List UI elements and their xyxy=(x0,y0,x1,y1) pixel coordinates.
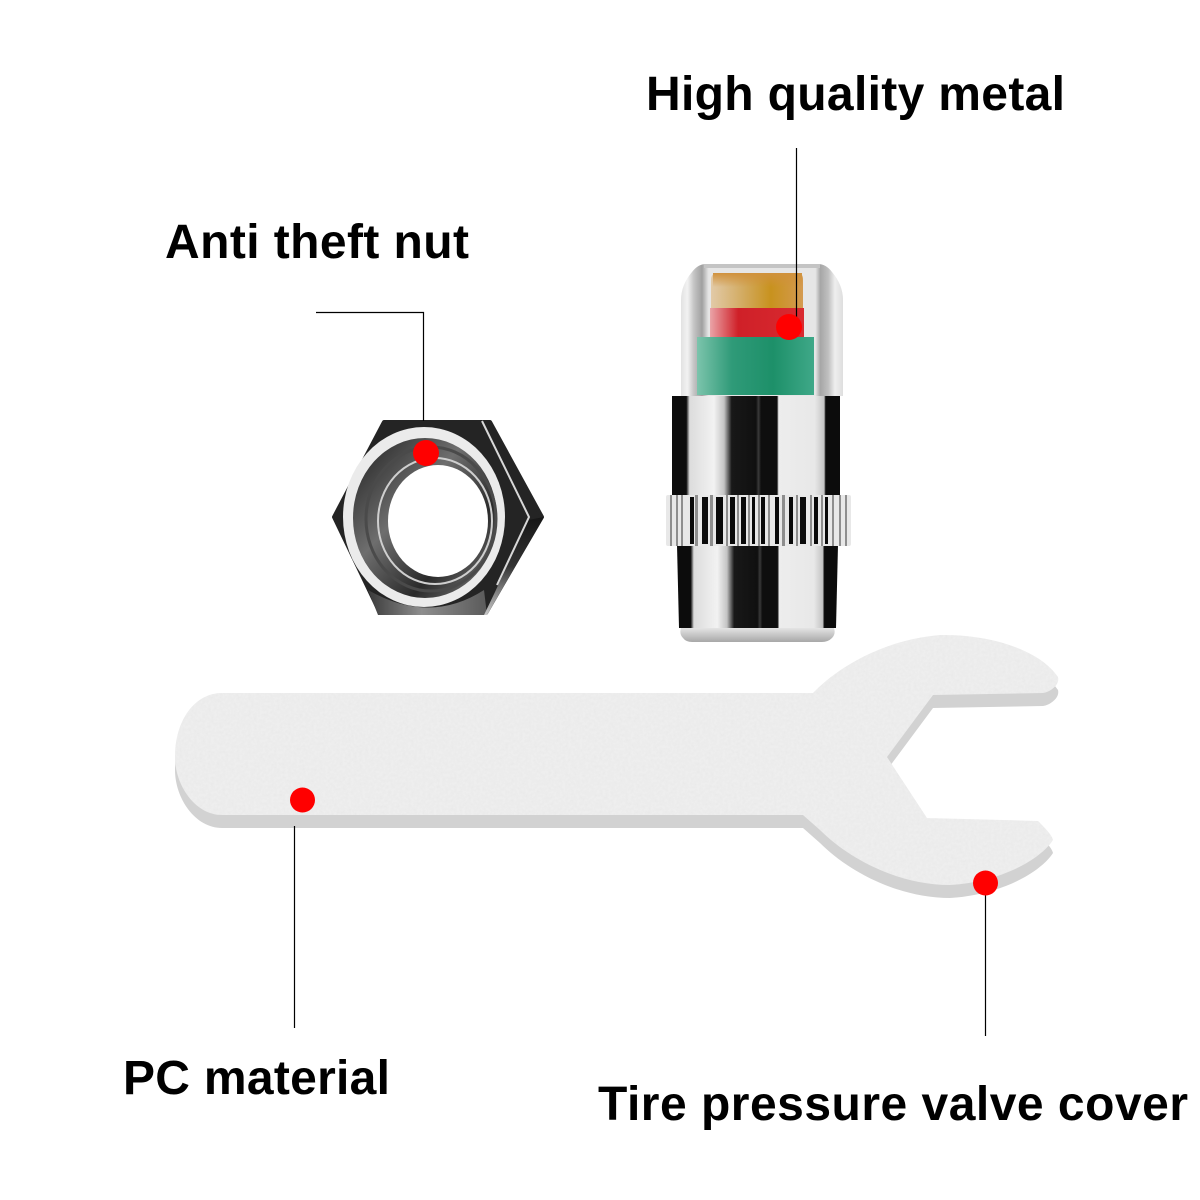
heading: Anti theft nut: Anti theft nut xyxy=(165,216,469,269)
heading: PC material: PC material xyxy=(123,1052,390,1105)
nut lower right facet xyxy=(484,517,544,615)
pressure indicator red band xyxy=(710,308,804,337)
icon: valve cap xyxy=(666,264,851,642)
pressure indicator green band xyxy=(697,337,814,395)
leader line: high quality metal xyxy=(796,148,798,320)
wrench face xyxy=(175,635,1058,885)
nut lower facet xyxy=(368,590,487,615)
orange band shadow xyxy=(713,273,802,287)
nut hole xyxy=(388,465,488,577)
knurled ring xyxy=(666,495,851,546)
heading: Tire pressure valve cover: Tire pressure valve cover xyxy=(598,1078,1188,1131)
icon: hex nut xyxy=(334,421,544,615)
leader line: tire pressure valve cover xyxy=(984,892,986,1036)
leader line: PC material xyxy=(294,826,296,1028)
clear cap xyxy=(681,264,843,396)
metal upper body xyxy=(672,396,840,496)
marker dot: valve xyxy=(776,314,802,340)
marker dot: wrench handle xyxy=(290,788,315,812)
pressure indicator orange band xyxy=(711,273,803,309)
nut thread xyxy=(353,438,497,598)
nut body xyxy=(334,422,542,613)
marker dot: wrench head xyxy=(973,870,998,896)
marker dot: nut xyxy=(413,440,439,466)
heading: High quality metal: High quality metal xyxy=(646,68,1065,121)
nut white face ring xyxy=(343,427,505,607)
leader line: anti theft nut xyxy=(316,312,424,421)
metal lower body xyxy=(677,545,838,628)
wrench edge xyxy=(175,648,1058,898)
bottom rim xyxy=(680,628,835,642)
icon: wrench xyxy=(175,635,1058,898)
nut right facet line xyxy=(482,421,529,585)
